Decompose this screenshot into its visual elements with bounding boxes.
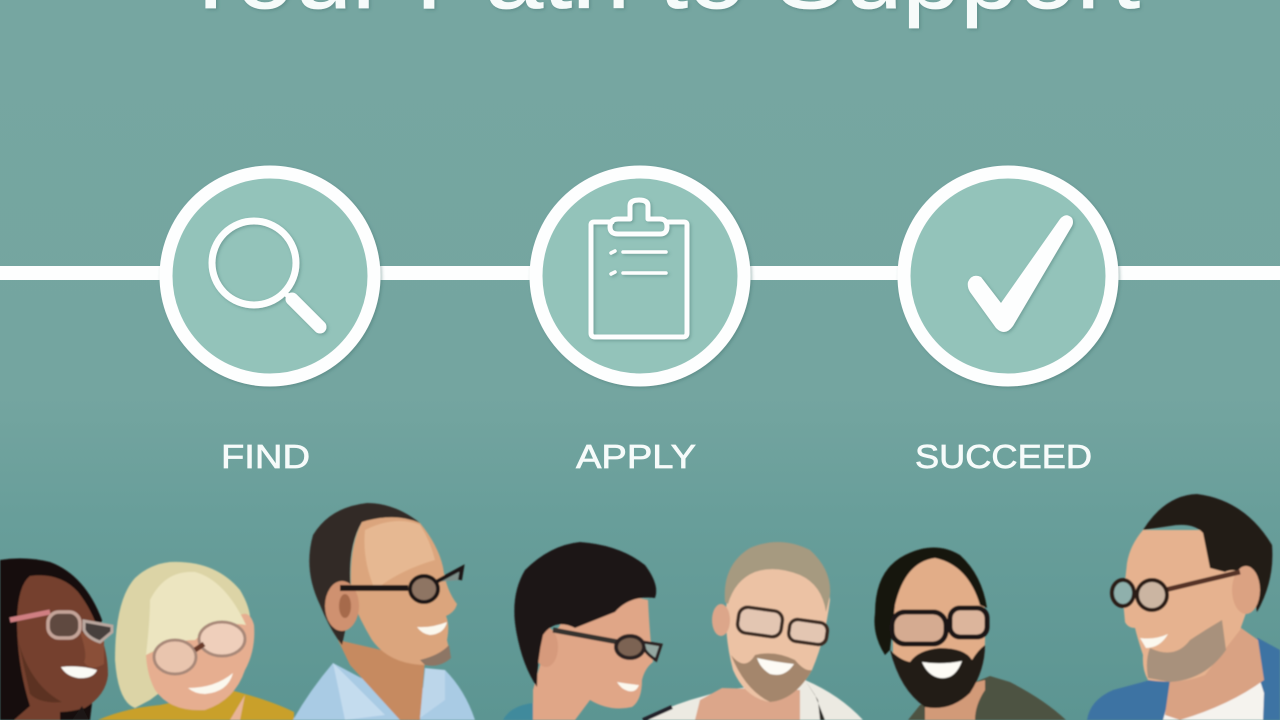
label: apply: APPLY — [576, 438, 696, 475]
step 1: find — [166, 172, 374, 475]
person 6: man with black glasses and beard — [874, 548, 1066, 720]
apply circle — [536, 172, 744, 380]
succeed circle — [904, 172, 1112, 380]
label: find: FIND — [221, 438, 310, 475]
step 2: apply — [536, 172, 744, 475]
person 3: man with short hair, blue shirt — [293, 503, 475, 720]
group photo of people — [0, 494, 1280, 720]
step 3: succeed — [904, 172, 1112, 475]
person 1: woman with pink glasses — [0, 558, 112, 720]
icon: clipboard — [591, 200, 687, 337]
person 5: man with grey hair and beard — [643, 542, 863, 720]
label: succeed: SUCCEED — [915, 438, 1092, 475]
timeline connector line — [0, 266, 1280, 280]
find circle — [166, 172, 374, 380]
icon: check mark — [968, 215, 1073, 332]
person 2: blonde woman — [98, 562, 294, 720]
person 7: man in denim jacket — [1087, 494, 1280, 720]
person 4: man with dark hair and glasses — [503, 542, 661, 720]
icon: magnifying glass — [212, 221, 320, 327]
